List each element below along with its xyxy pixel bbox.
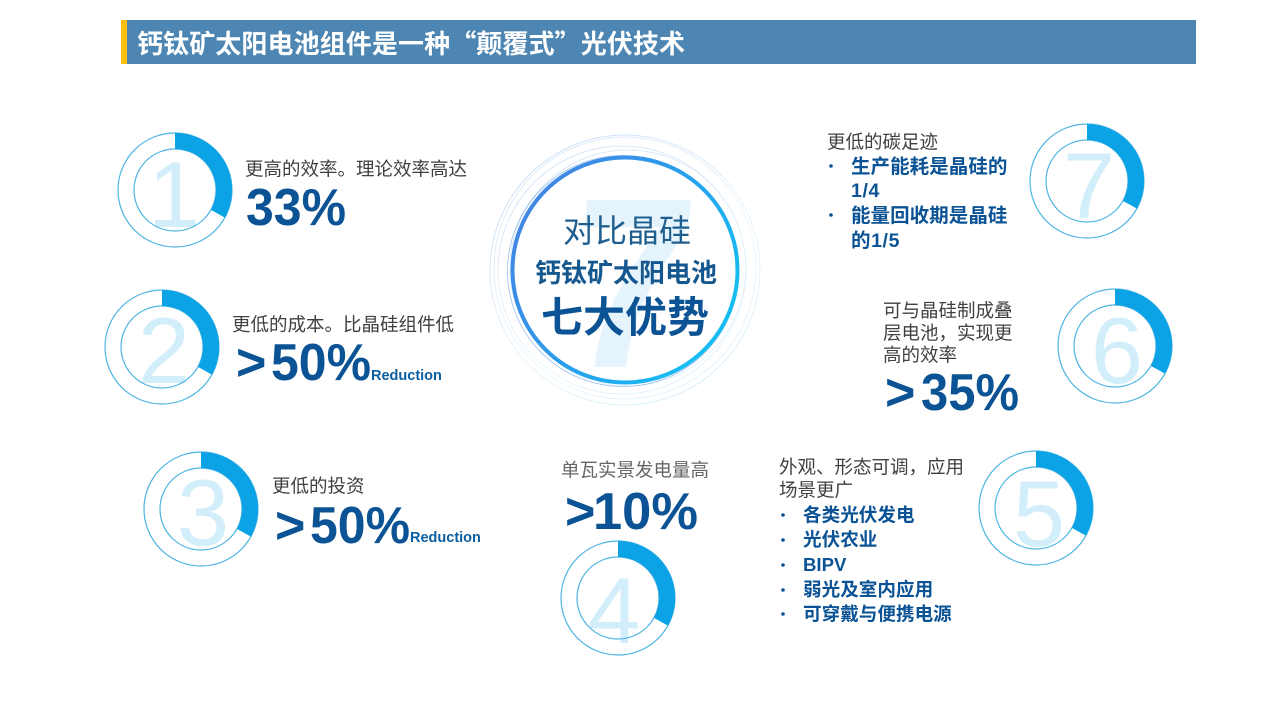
value 6: > xyxy=(885,364,915,422)
item 2: lower cost xyxy=(105,290,454,404)
item 7: lower carbon footprint xyxy=(827,124,1144,252)
decorative large 7: 7 xyxy=(558,148,705,419)
text 6: 层电池，实现更 xyxy=(883,322,1013,344)
center heading line 2: 钙钛矿太阳电池 xyxy=(535,258,717,288)
bullet list 5: 可穿戴与便携电源 xyxy=(803,604,952,624)
text 6: 高的效率 xyxy=(883,344,957,366)
text 6: 可与晶硅制成叠 xyxy=(883,300,1013,321)
value 4: > xyxy=(565,483,595,541)
value 2: > xyxy=(236,334,266,392)
bullet list 5: 光伏农业 xyxy=(803,529,877,550)
value 6: 35% xyxy=(921,364,1019,422)
ring 1: 1 xyxy=(148,142,200,247)
title bar xyxy=(121,20,1196,64)
bullet list 5 xyxy=(781,504,952,624)
ring 6: 6 xyxy=(1091,298,1143,403)
ring 5 xyxy=(979,451,1093,566)
text 7: 更低的碳足迹 xyxy=(827,132,938,152)
text 1: 更高的效率。理论效率高达 xyxy=(245,158,467,180)
ring 7: 7 xyxy=(1063,133,1115,238)
text 4: 单瓦实景发电量高 xyxy=(561,460,709,480)
text 3: 更低的投资 xyxy=(272,476,365,496)
ring 1 xyxy=(118,133,232,247)
ring 5: 5 xyxy=(1013,461,1065,566)
ring 7 xyxy=(1030,124,1144,238)
text 6 xyxy=(883,300,1013,366)
bullet list 5: BIPV xyxy=(803,554,847,575)
text 5: 外观、形态可调，应用 xyxy=(779,456,964,478)
bullet list 7: 生产能耗是晶硅的 xyxy=(851,156,1008,178)
bullet list 7: 1/4 xyxy=(851,180,880,202)
text 5 xyxy=(779,456,964,500)
item 4: higher energy yield xyxy=(561,460,709,663)
ring 3 xyxy=(144,452,258,566)
central circle: seven advantages xyxy=(490,135,760,419)
value 6 xyxy=(885,364,1019,422)
value 3: 50% xyxy=(310,497,410,555)
unit 2: Reduction xyxy=(371,368,442,384)
text 5: 场景更广 xyxy=(779,480,853,500)
ring 6 xyxy=(1058,289,1172,403)
bullet list 7: 能量回收期是晶硅 xyxy=(851,205,1008,227)
bullet list 5: 各类光伏发电 xyxy=(803,504,915,526)
item 6: tandem cells xyxy=(883,289,1172,422)
bullet list 7: 的1/5 xyxy=(851,230,900,252)
bullet list 5: 弱光及室内应用 xyxy=(803,579,933,600)
value 3: > xyxy=(275,497,305,555)
ring 4: 4 xyxy=(588,558,640,663)
item 3: lower investment xyxy=(144,452,481,566)
value 4: 10% xyxy=(593,483,698,541)
value 1: 33% xyxy=(246,179,346,237)
value 2: 50% xyxy=(271,334,371,392)
text 2: 更低的成本。比晶硅组件低 xyxy=(232,314,454,335)
item 5: adjustable appearance xyxy=(779,451,1093,624)
ring 2 xyxy=(105,290,219,404)
ring 4 xyxy=(561,541,675,663)
center heading line 1: 对比晶硅 xyxy=(563,213,691,249)
ring 3: 3 xyxy=(177,460,229,565)
item 1: higher efficiency xyxy=(118,133,467,247)
center heading line 3: 七大优势 xyxy=(541,294,709,341)
unit 3: Reduction xyxy=(410,530,481,546)
bullet list 7 xyxy=(829,156,1008,252)
ring 2: 2 xyxy=(138,298,190,403)
title: 钙钛矿太阳电池组件是一种“颠覆式”光伏技术 xyxy=(137,24,685,61)
